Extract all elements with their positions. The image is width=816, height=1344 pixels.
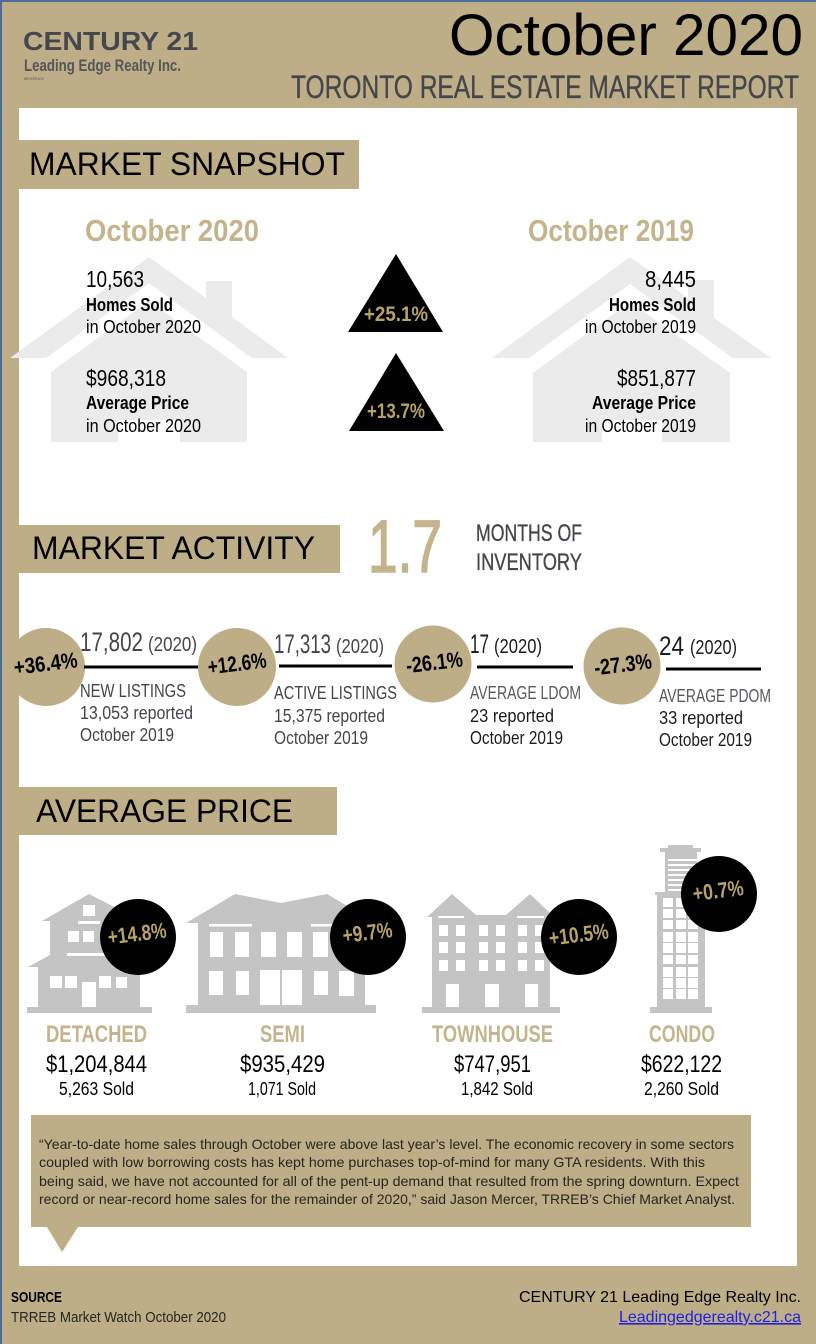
stat: months of inventory: MONTHS OF <box>476 520 582 547</box>
card: detached <box>27 894 176 1099</box>
triangle: homes sold change: +25.1% <box>364 303 428 326</box>
callout: analyst quote: “Year-to-date home sales through October were above last year’s level. The economic recovery in some sectors <box>39 1136 734 1152</box>
heading: market snapshot: MARKET SNAPSHOT <box>29 146 345 182</box>
icon: house outline left <box>10 257 288 442</box>
icon: townhouse <box>422 894 560 1013</box>
callout: analyst quote: coupled with low borrowing costs has kept home purchases top-of-mind for many GTA residents. With this <box>39 1154 705 1170</box>
column: October 2020 stats: in October 2020 <box>86 317 201 337</box>
card: townhouse: TOWNHOUSE <box>432 1021 553 1048</box>
card: townhouse: $747,951 <box>454 1051 531 1078</box>
card: townhouse: 1,842 Sold <box>461 1079 533 1099</box>
column: October 2019 stats: Average Price <box>592 393 696 413</box>
icon: condo tower <box>650 845 712 1013</box>
column: October 2020 stats: Homes Sold <box>86 295 173 315</box>
card: semi: $935,429 <box>240 1051 325 1078</box>
card: townhouse <box>422 894 617 1099</box>
metric: average LDOM: -26.1% <box>404 646 464 678</box>
metric: average PDOM: 24 <box>659 631 684 661</box>
metric: active listings: +12.6% <box>206 647 268 679</box>
column: October 2019 stats <box>528 213 696 436</box>
heading: market activity: MARKET ACTIVITY <box>32 530 315 566</box>
metric: average LDOM <box>394 626 581 748</box>
badge: townhouse change: +10.5% <box>547 918 610 951</box>
callout: analyst quote: being said, we have not accounted for all of the pent-up demand that resulted from the spring downturn. Expect <box>39 1173 739 1189</box>
callout: analyst quote <box>31 1115 751 1252</box>
metric: average PDOM: (2020) <box>690 637 737 659</box>
panel: average price <box>19 787 757 1099</box>
column: October 2020 stats: 10,563 <box>86 266 144 292</box>
column: October 2019 stats: in October 2019 <box>585 416 696 436</box>
triangle: average price change: +13.7% <box>367 400 425 423</box>
column: October 2020 stats <box>85 213 259 436</box>
triangle: homes sold change <box>348 254 443 332</box>
contact details: Leadingedgerealty.c21.ca <box>619 1309 801 1326</box>
metric: new listings <box>7 627 199 745</box>
logo: Century 21 Leading Edge Realty <box>23 26 198 81</box>
card: condo <box>641 845 757 1099</box>
contact details: CENTURY 21 Leading Edge Realty Inc. <box>519 1289 801 1306</box>
metric: average LDOM: (2020) <box>494 636 542 658</box>
panel: market activity <box>7 505 771 750</box>
column: October 2020 stats: in October 2020 <box>86 416 201 436</box>
metric: average LDOM: AVERAGE LDOM <box>470 683 581 703</box>
stat: months of inventory: INVENTORY <box>476 549 582 576</box>
stat: months of inventory: 1.7 <box>368 505 442 588</box>
metric: active listings: 15,375 reported <box>274 706 385 726</box>
heading: market snapshot <box>19 140 359 189</box>
card: semi <box>186 894 406 1099</box>
badge: townhouse change <box>541 899 617 975</box>
card: detached: DETACHED <box>46 1021 147 1048</box>
stat: months of inventory <box>368 505 582 588</box>
metric: new listings: NEW LISTINGS <box>80 681 186 701</box>
column: October 2020 stats: $968,318 <box>86 365 166 391</box>
column: October 2019 stats: $851,877 <box>617 365 696 391</box>
source note: SOURCE <box>11 1289 62 1306</box>
metric: average LDOM: 23 reported <box>470 706 554 726</box>
metric: new listings: October 2019 <box>80 725 174 745</box>
title: October 2020 <box>449 3 803 68</box>
card: condo: $622,122 <box>641 1051 722 1078</box>
metric: average PDOM: October 2019 <box>659 730 752 750</box>
metric: average LDOM: October 2019 <box>470 728 563 748</box>
logo: Century 21 Leading Edge Realty: Leading Edge Realty Inc. <box>24 56 181 75</box>
column: October 2020 stats: Average Price <box>86 393 189 413</box>
panel: market snapshot <box>10 140 771 442</box>
column: October 2020 stats: October 2020 <box>85 213 259 248</box>
logo: Century 21 Leading Edge Realty: CENTURY 21 <box>23 26 198 56</box>
card: detached: 5,263 Sold <box>59 1079 134 1099</box>
card: semi: 1,071 Sold <box>248 1079 316 1099</box>
badge: semi change: +9.7% <box>341 917 394 948</box>
card: semi: SEMI <box>260 1021 305 1048</box>
metric: active listings: October 2019 <box>274 728 368 748</box>
source note <box>11 1289 226 1326</box>
card: condo: CONDO <box>649 1021 715 1048</box>
badge: semi change <box>330 899 406 975</box>
column: October 2019 stats: Homes Sold <box>609 295 696 315</box>
callout: analyst quote: record or near-record home sales for the remainder of 2020,” said Jason Mercer, TRREB’s Chief Market Analyst. <box>39 1191 735 1207</box>
icon: detached house <box>27 894 152 1013</box>
metric: new listings: (2020) <box>148 634 197 656</box>
heading: average price: AVERAGE PRICE <box>36 793 293 829</box>
metric: average PDOM: -27.3% <box>593 648 653 680</box>
metric: average PDOM: AVERAGE PDOM <box>659 686 771 706</box>
logo: Century 21 Leading Edge Realty: BROKERAGE <box>24 76 44 81</box>
metric: average PDOM: 33 reported <box>659 708 743 728</box>
metric: active listings: (2020) <box>336 636 384 658</box>
metric: new listings: 17,802 <box>80 627 143 657</box>
icon: semi-detached house <box>186 894 376 1013</box>
icon: house outline right <box>492 257 771 442</box>
metric: average PDOM <box>584 628 771 750</box>
metric: active listings: 17,313 <box>274 629 331 659</box>
badge: condo change <box>681 856 757 932</box>
contact details <box>519 1289 801 1326</box>
metric: new listings: 13,053 reported <box>80 703 193 723</box>
column: October 2019 stats: 8,445 <box>645 266 696 292</box>
card: detached: $1,204,844 <box>46 1051 147 1078</box>
heading: market activity <box>19 525 340 573</box>
badge: condo change: +0.7% <box>691 875 745 906</box>
metric: active listings: ACTIVE LISTINGS <box>274 683 397 703</box>
column: October 2019 stats: in October 2019 <box>585 317 696 337</box>
heading: average price <box>19 787 337 835</box>
metric: average LDOM: 17 <box>470 629 489 659</box>
triangle: average price change <box>349 353 444 431</box>
card: condo: 2,260 Sold <box>644 1079 719 1099</box>
badge: detached change: +14.8% <box>106 918 168 950</box>
metric: new listings: +36.4% <box>12 647 79 680</box>
column: October 2019 stats: October 2019 <box>528 213 694 248</box>
metric: active listings <box>198 628 397 748</box>
source note: TRREB Market Watch October 2020 <box>11 1309 226 1326</box>
badge: detached change <box>100 899 176 975</box>
